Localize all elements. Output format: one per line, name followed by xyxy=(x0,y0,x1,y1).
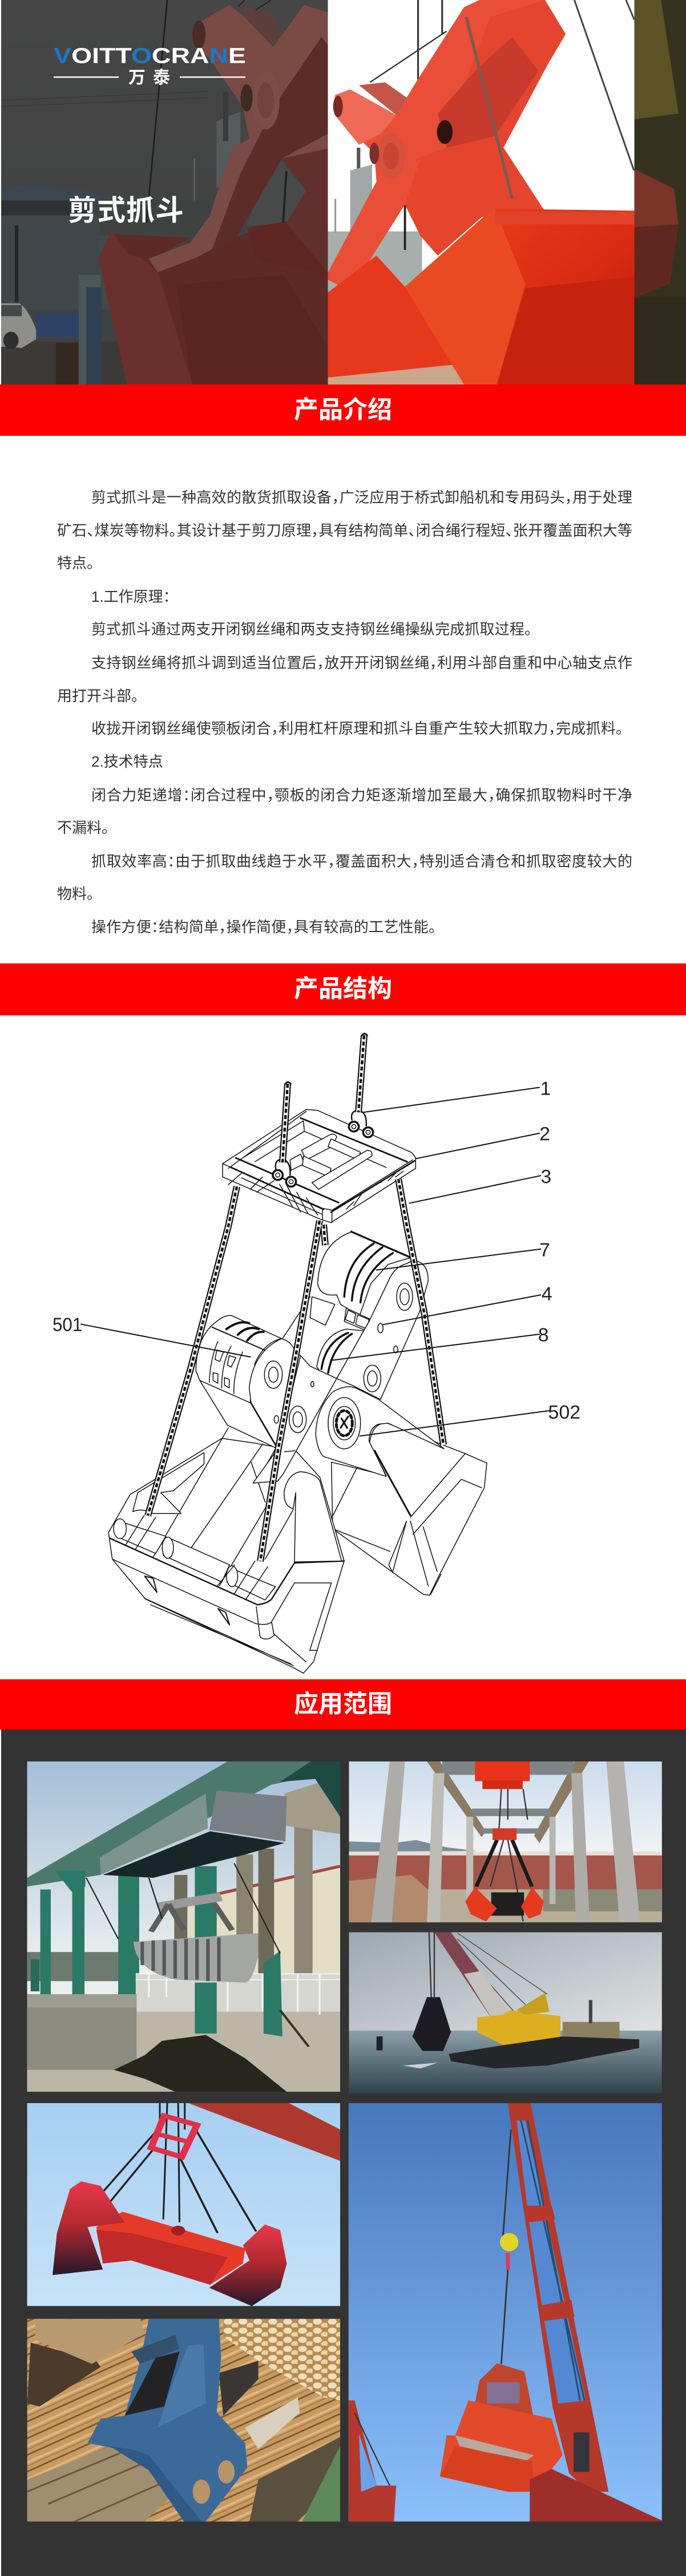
lower lever with rosette xyxy=(316,1387,444,1476)
intro text block: 用打开斗部。 xyxy=(57,687,139,704)
scissor arms xyxy=(328,0,566,291)
intro text block: 2.技术特点 xyxy=(91,753,163,770)
part number labels: 2 xyxy=(539,1123,550,1145)
part number labels: 502 xyxy=(548,1402,580,1423)
right darkened strip xyxy=(634,0,686,384)
rollers xyxy=(290,1134,372,1189)
intro text block xyxy=(57,489,632,935)
intro text block: 闭合力矩递增：闭合过程中，颚板的闭合力矩逐渐增加至最大，确保抓取物料时干净 xyxy=(91,787,632,804)
bucket rollers xyxy=(114,1516,275,1600)
section heading: 产品介绍 xyxy=(0,384,686,436)
right bucket xyxy=(330,1423,487,1595)
intro text block: 支持钢丝绳将抓斗调到适当位置后，放开开闭钢丝绳，利用斗部自重和中心轴支点作 xyxy=(91,654,632,671)
hero banner xyxy=(1,0,686,384)
hero title: 剪式抓斗 xyxy=(68,195,184,226)
leader lines xyxy=(81,1087,550,1436)
application panel xyxy=(1,1730,686,2576)
logo xyxy=(54,44,246,87)
right bright photo panel xyxy=(328,0,634,384)
part number labels xyxy=(53,1078,580,1423)
part number labels: 4 xyxy=(542,1283,552,1305)
section heading: 产品结构: 产品结构 xyxy=(294,975,392,1003)
logo wordmark: VOITT OCRA NE xyxy=(54,44,246,68)
intro text block: 特点。 xyxy=(57,554,94,572)
intro text block: 不漏料。 xyxy=(57,819,109,836)
intro text block: 矿石、煤炭等物料。其设计基于剪刀原理，具有结构简单、闭合绳行程短、张开覆盖面积大等 xyxy=(57,522,632,539)
upper sheave block xyxy=(310,1231,428,1399)
left sheave block xyxy=(196,1315,301,1449)
logo chinese name: 万泰 xyxy=(128,68,177,87)
intro text block: 抓取效率高：由于抓取曲线趋于水平，覆盖面积大，特别适合清仓和抓取密度较大的 xyxy=(91,853,632,870)
part number labels: 3 xyxy=(540,1166,551,1188)
intro text block: 剪式抓斗是一种高效的散货抓取设备，广泛应用于桥式卸船机和专用码头，用于处理 xyxy=(91,489,632,506)
part number labels: 501 xyxy=(53,1314,82,1336)
part number labels: 8 xyxy=(538,1324,549,1346)
intro text block: 1.工作原理： xyxy=(91,588,171,605)
central plate xyxy=(253,1297,337,1483)
top spreader frame xyxy=(223,1109,415,1222)
section heading: 产品介绍: 产品介绍 xyxy=(294,396,392,424)
photo: green gantry trash grab xyxy=(27,1761,340,2092)
section heading: 产品结构 xyxy=(0,963,686,1015)
section heading: 应用范围 xyxy=(0,1679,686,1730)
shackles xyxy=(273,1111,373,1186)
photo: orange clamshell grab under crane xyxy=(349,2103,662,2521)
intro text block: 收拢开闭钢丝绳使颚板闭合，利用杠杆原理和抓斗自重产生较大抓取力，完成抓料。 xyxy=(91,720,623,737)
intro text block: 剪式抓斗通过两支开闭钢丝绳和两支支持钢丝绳操纵完成抓取过程。 xyxy=(91,621,532,638)
photo: concrete gantry with electric hoist xyxy=(349,1761,662,1922)
intro text block: 操作方便：结构简单，操作简便，具有较高的工艺性能。 xyxy=(91,918,436,935)
chains xyxy=(148,1034,443,1561)
intro text block: 物料。 xyxy=(57,885,94,902)
part number labels: 1 xyxy=(540,1078,551,1099)
photo: floating crane on barge xyxy=(349,1932,662,2093)
photo: blue log grab xyxy=(27,2319,340,2521)
structure diagram xyxy=(53,1032,580,1674)
section heading: 应用范围: 应用范围 xyxy=(294,1691,392,1718)
left darkened photo panel xyxy=(1,0,328,384)
dark background xyxy=(1,1730,686,2576)
bucket xyxy=(328,256,453,378)
part number labels: 7 xyxy=(539,1240,550,1261)
photo: red scissor grab in sky xyxy=(27,2103,340,2306)
left bucket xyxy=(108,1428,344,1673)
